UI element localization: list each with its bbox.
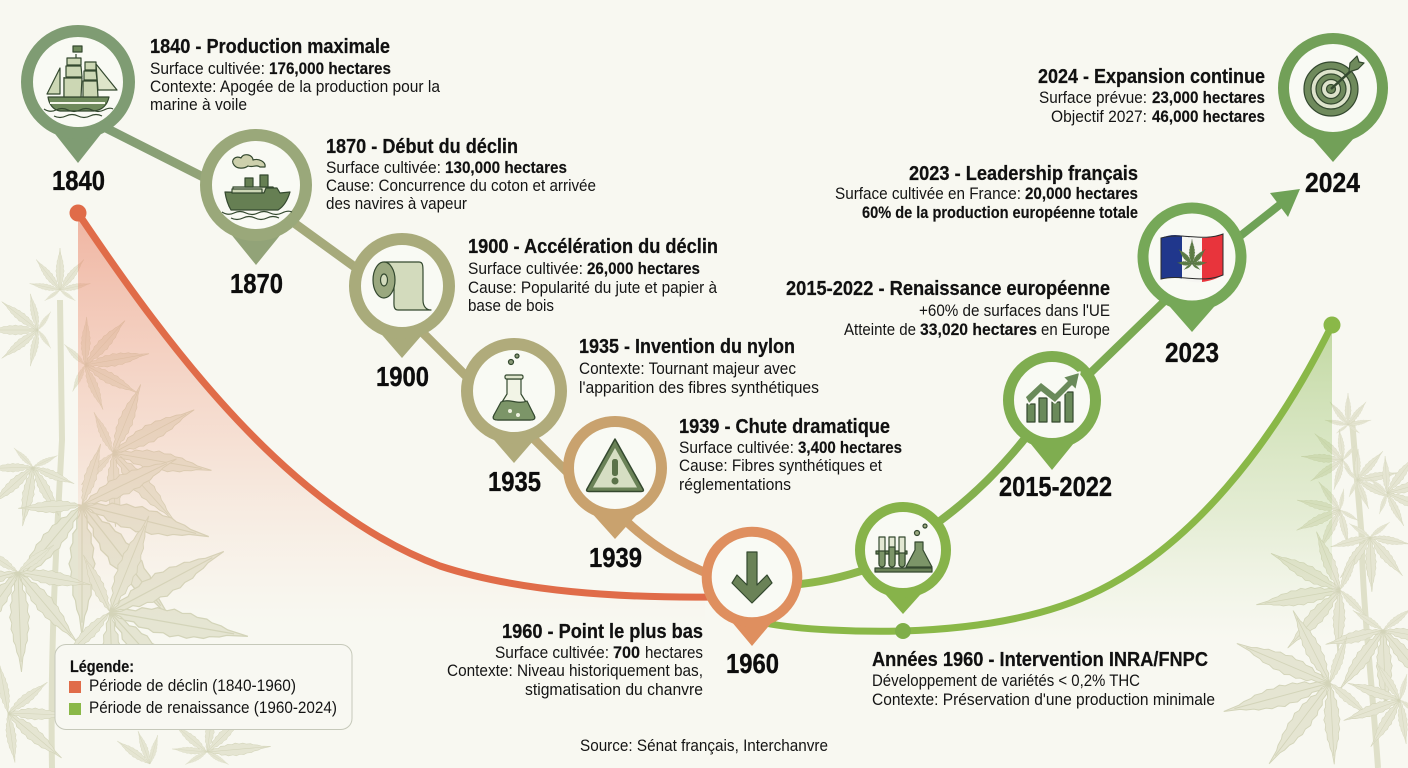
legend — [55, 644, 352, 730]
pin 2024 — [1284, 38, 1382, 162]
text block: 2024: 23,000 hectares — [1152, 89, 1265, 107]
text block: 1900: 1900 - Accélération du déclin — [468, 235, 718, 258]
text block: 2024: Objectif 2027: — [1051, 108, 1147, 126]
text block: 1870: 130,000 hectares — [445, 159, 567, 177]
lower-left leaf — [0, 663, 68, 763]
icon: test tubes and flask — [875, 524, 932, 572]
pin 1960 — [707, 532, 797, 646]
text block: 2023: 20,000 hectares — [1025, 185, 1138, 203]
icon: French flag with hemp leaf — [1161, 234, 1223, 282]
text block: 1840: 176,000 hectares — [269, 60, 391, 78]
icon: target with arrow — [1304, 56, 1364, 116]
text block: 1935: 1935 - Invention du nylon — [579, 335, 795, 358]
text block: 1939: Surface cultivée: — [679, 439, 794, 457]
text block: 1960: hectares — [645, 644, 703, 662]
text block: 2015-2022: Atteinte de — [844, 321, 916, 339]
background plant: left — [0, 248, 271, 768]
renaissance connector — [790, 288, 1178, 585]
text block: 1935: l'apparition des fibres synthétiques — [579, 379, 819, 397]
icon: down arrow — [732, 552, 772, 603]
text block: 1870: Cause: Concurrence du coton et arrivée — [326, 177, 596, 195]
text block: 2024 — [1038, 65, 1265, 126]
pin 1840 — [27, 31, 129, 163]
text block: 1840: 1840 - Production maximale — [150, 35, 390, 58]
text block: 2023: 2023 - Leadership français — [909, 162, 1138, 185]
text block: 1900 — [468, 235, 718, 315]
icon: steamship — [222, 155, 292, 220]
text block: 1840: Contexte: Apogée de la production pour la — [150, 78, 441, 96]
icon: toilet paper roll — [373, 262, 431, 310]
legend: Légende: — [70, 658, 134, 676]
decline connector — [100, 125, 725, 580]
text block: 1960: Contexte: Niveau historiquement bas, — [447, 662, 703, 680]
text block: 2024: 2024 - Expansion continue — [1038, 65, 1265, 88]
icon: rising chart — [1025, 372, 1080, 422]
year label 1939: 1939 — [589, 542, 642, 573]
text block: 2023: 60% de la production européenne totale — [862, 204, 1138, 222]
pin 1935 — [467, 344, 561, 463]
text block: Années 1960 — [872, 648, 1215, 709]
text block: 2024: 46,000 hectares — [1152, 108, 1265, 126]
text block: Années 1960: Contexte: Préservation d'une production minimale — [872, 691, 1215, 709]
text block: 1870: Surface cultivée: — [326, 159, 441, 177]
text block: 1840: Surface cultivée: — [150, 60, 265, 78]
text block: Années 1960: Années 1960 - Intervention INRA/FNPC — [872, 648, 1208, 671]
arrow to 2024 — [1225, 189, 1300, 248]
year label 2024: 2024 — [1305, 167, 1360, 198]
icon: sailing ship — [44, 46, 117, 118]
text block: 2024: Surface prévue: — [1039, 89, 1147, 107]
text block: 2015-2022: en Europe — [1041, 321, 1110, 339]
icon: warning triangle — [587, 439, 643, 492]
text block: 1939: 3,400 hectares — [798, 439, 902, 457]
pin 1870 — [206, 135, 306, 265]
text block: 2015-2022: +60% de surfaces dans l'UE — [919, 302, 1110, 320]
text block: 1960 — [447, 620, 703, 699]
bottom leaf — [172, 707, 271, 767]
text block: 1960: stigmatisation du chanvre — [525, 681, 703, 699]
year label 1870: 1870 — [230, 268, 283, 299]
text block: 1900: base de bois — [468, 297, 554, 315]
pin Années 1960 — [860, 507, 946, 614]
text block: 1840 — [150, 35, 441, 114]
text block: 2023 — [835, 162, 1138, 222]
year label 1935: 1935 — [488, 466, 541, 497]
text block: 1840: marine à voile — [150, 96, 247, 114]
text block: 1870: 1870 - Début du déclin — [326, 135, 518, 158]
text block: 1935: Contexte: Tournant majeur avec — [579, 360, 796, 378]
text block: 1870 — [326, 135, 596, 213]
text block: 2015-2022: 33,020 hectares — [920, 321, 1037, 339]
decline curve — [70, 204, 715, 597]
year label 1840: 1840 — [52, 165, 105, 196]
pin 1939 — [568, 422, 662, 539]
area under renaissance curve — [903, 325, 1332, 645]
legend: Période de renaissance (1960-2024) — [89, 699, 337, 717]
text block: 2023: Surface cultivée en France: — [835, 185, 1021, 203]
source note: Source: Sénat français, Interchanvre — [580, 737, 828, 755]
pin 1900 — [355, 239, 449, 358]
pin 2023 — [1143, 208, 1241, 332]
text block: 1939: Cause: Fibres synthétiques et — [679, 457, 882, 475]
year label 2015-2022: 2015-2022 — [999, 471, 1112, 502]
text block: 1960: 700 — [613, 644, 640, 662]
text block: 1960: 1960 - Point le plus bas — [502, 620, 703, 643]
pin 2015-2022 — [1008, 356, 1096, 470]
text block: 1870: des navires à vapeur — [326, 195, 467, 213]
background plant: right — [1203, 393, 1408, 768]
bottom small leaf — [115, 730, 161, 767]
text block: 2015-2022 — [786, 277, 1110, 339]
legend: Période de déclin (1840-1960) — [89, 677, 296, 695]
year label 2023: 2023 — [1165, 337, 1219, 368]
text block: 1939: 1939 - Chute dramatique — [679, 415, 890, 438]
year label 1900: 1900 — [376, 361, 429, 392]
text block: 1960: Surface cultivée: — [495, 644, 609, 662]
icon: flask — [493, 354, 535, 420]
text block: 1939 — [679, 415, 902, 494]
text block: Années 1960: Développement de variétés < 0,2% THC — [872, 672, 1140, 690]
text block: 1900: Surface cultivée: — [468, 260, 583, 278]
text block: 1939: réglementations — [679, 476, 791, 494]
renaissance curve — [765, 316, 1340, 639]
year label 1960: 1960 — [726, 648, 779, 679]
text block: 1900: 26,000 hectares — [587, 260, 700, 278]
text block: 1935 — [579, 335, 819, 397]
text block: 1900: Cause: Popularité du jute et papier à — [468, 279, 718, 297]
text block: 2015-2022: 2015-2022 - Renaissance européenne — [786, 277, 1110, 300]
area under decline curve — [78, 213, 705, 640]
